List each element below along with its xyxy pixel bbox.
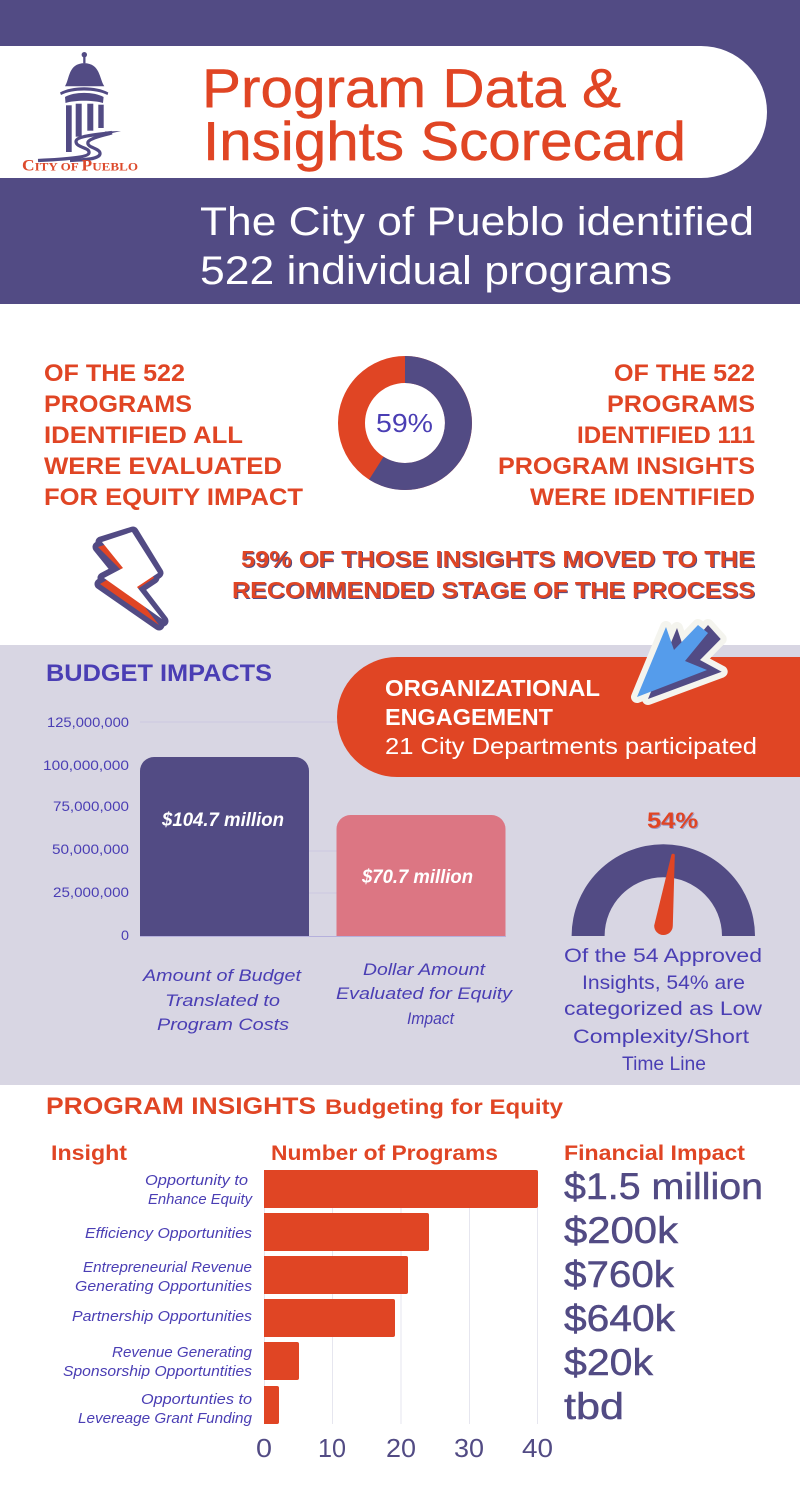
logo: City of Pueblo: CITY OF PUEBLO [22, 158, 138, 175]
subtitle [200, 200, 754, 293]
bar chart: number of programs [256, 1170, 553, 1463]
caption: gauge: Insights, 54% are [582, 972, 745, 994]
bar value: 70.7: $70.7 million [361, 867, 473, 888]
bars [264, 1170, 538, 1424]
heading: budget impacts: BUDGET IMPACTS [46, 660, 272, 687]
insight labels: Efficiency Opportunities [85, 1225, 253, 1242]
axis labels: 25,000,000 [53, 884, 129, 900]
financial impact values: $20k [564, 1342, 654, 1383]
x axis labels [256, 1433, 553, 1463]
text block: program insights identified: PROGRAM INSIGHTS [498, 453, 755, 480]
caption: gauge [564, 945, 763, 1075]
financial impact values: $1.5 million [564, 1166, 763, 1207]
text block: equity impact: PROGRAMS [44, 391, 192, 418]
callout: 59% moved to recommended stage: RECOMMENDED STAGE OF THE PROCESS [233, 578, 756, 604]
icon: blue arrow [637, 625, 722, 699]
column headings [51, 1142, 745, 1165]
captions: budget bars: Impact [407, 1009, 455, 1028]
text block: program insights identified [498, 360, 755, 511]
x axis labels: 30 [454, 1433, 484, 1463]
logo: City of Pueblo [22, 52, 138, 175]
column headings: Insight [51, 1142, 127, 1165]
callout: 59% moved to recommended stage [232, 546, 756, 604]
x axis labels: 0 [256, 1433, 272, 1463]
callout: 59% moved to recommended stage: RECOMMENDED STAGE OF THE PROCESS [232, 577, 755, 603]
gauge: 54% [572, 808, 755, 936]
axis labels: 0 [121, 927, 129, 943]
text block: program insights identified: PROGRAMS [607, 391, 755, 418]
banner: organizational engagement: ORGANIZATIONAL [385, 675, 600, 701]
caption: gauge: categorized as Low [564, 998, 763, 1020]
column headings: Financial Impact [564, 1142, 745, 1165]
donut chart: 59%: 59% [376, 408, 433, 438]
bar value: 104.7: $104.7 million [161, 810, 284, 831]
bar: budget translated to program costs [140, 757, 309, 936]
bar: evaluated for equity [336, 815, 506, 936]
insight labels: Generating Opportunities [75, 1278, 253, 1295]
captions: budget bars: Amount of Budget [142, 966, 302, 985]
bar chart: budget [43, 714, 506, 943]
heading: program insights: Budgeting for Equity [325, 1096, 563, 1119]
gauge: 54%: 54% [648, 809, 699, 834]
header band [0, 0, 800, 304]
captions: budget bars: Translated to [165, 991, 280, 1010]
insight labels: Revenue Generating [112, 1344, 253, 1361]
text block: program insights identified: OF THE 522 [614, 360, 755, 387]
insight labels: Opportunity to [145, 1172, 248, 1189]
text block: equity impact: FOR EQUITY IMPACT [44, 484, 303, 511]
captions: budget bars: Evaluated for Equity [336, 984, 514, 1003]
insight labels: Enhance Equity [148, 1191, 253, 1208]
financial impact values: $760k [564, 1254, 675, 1295]
banner: organizational engagement: 21 City Departments participated [385, 733, 757, 759]
caption: gauge: Of the 54 Approved [564, 945, 762, 967]
financial impact values: $640k [564, 1298, 676, 1339]
x axis labels: 40 [522, 1433, 553, 1463]
x axis labels: 10 [318, 1433, 346, 1463]
subtitle: 522 individual programs [200, 249, 672, 293]
insight labels: Opportunties to [141, 1391, 252, 1408]
title: Insights Scorecard [203, 110, 686, 172]
text block: equity impact: WERE EVALUATED [44, 453, 282, 480]
insight labels: Partnership Opportunities [72, 1308, 253, 1325]
captions: budget bars: Program Costs [157, 1015, 290, 1034]
banner: organizational engagement: ENGAGEMENT [385, 704, 553, 730]
axis labels: 100,000,000 [43, 757, 129, 773]
icon: lightning bolt [98, 532, 163, 625]
captions: budget bars: Dollar Amount [363, 960, 486, 979]
text block: program insights identified: WERE IDENTIFIED [530, 484, 755, 511]
banner: organizational engagement [337, 657, 800, 777]
donut chart: 59% [352, 370, 458, 476]
heading: program insights [46, 1093, 563, 1120]
heading: program insights: PROGRAM INSIGHTS [46, 1093, 316, 1120]
insight labels: Sponsorship Opportuntities [63, 1363, 253, 1380]
axis labels: 50,000,000 [52, 841, 129, 857]
text block: equity impact: OF THE 522 [44, 360, 185, 387]
text block: program insights identified: IDENTIFIED 111 [577, 422, 755, 449]
text block: equity impact [44, 360, 303, 511]
caption: gauge: Time Line [622, 1053, 706, 1075]
axis labels: 75,000,000 [53, 798, 129, 814]
insight labels: Entrepreneurial Revenue [83, 1259, 252, 1276]
panel: budget impacts background [0, 645, 800, 1085]
x axis labels: 20 [386, 1433, 416, 1463]
insight labels: Levereage Grant Funding [78, 1410, 253, 1427]
axis labels [43, 714, 129, 943]
column headings: Number of Programs [271, 1142, 498, 1165]
captions: budget bars [142, 960, 514, 1034]
insight labels [63, 1172, 253, 1427]
financial impact values: tbd [564, 1386, 624, 1427]
callout: 59% moved to recommended stage: 59% OF THOSE INSIGHTS MOVED TO THE [241, 546, 755, 572]
axis labels: 125,000,000 [47, 714, 129, 730]
caption: gauge: Complexity/Short [573, 1026, 750, 1048]
title [202, 57, 686, 172]
financial impact values: $200k [564, 1210, 679, 1251]
text block: equity impact: IDENTIFIED ALL [44, 422, 243, 449]
callout: 59% moved to recommended stage: 59% OF THOSE INSIGHTS MOVED TO THE [242, 547, 756, 573]
gauge: 54%: 54% [647, 808, 698, 833]
subtitle: The City of Pueblo identified [200, 200, 754, 244]
financial impact values [564, 1166, 763, 1427]
title: Program Data & [202, 57, 621, 119]
